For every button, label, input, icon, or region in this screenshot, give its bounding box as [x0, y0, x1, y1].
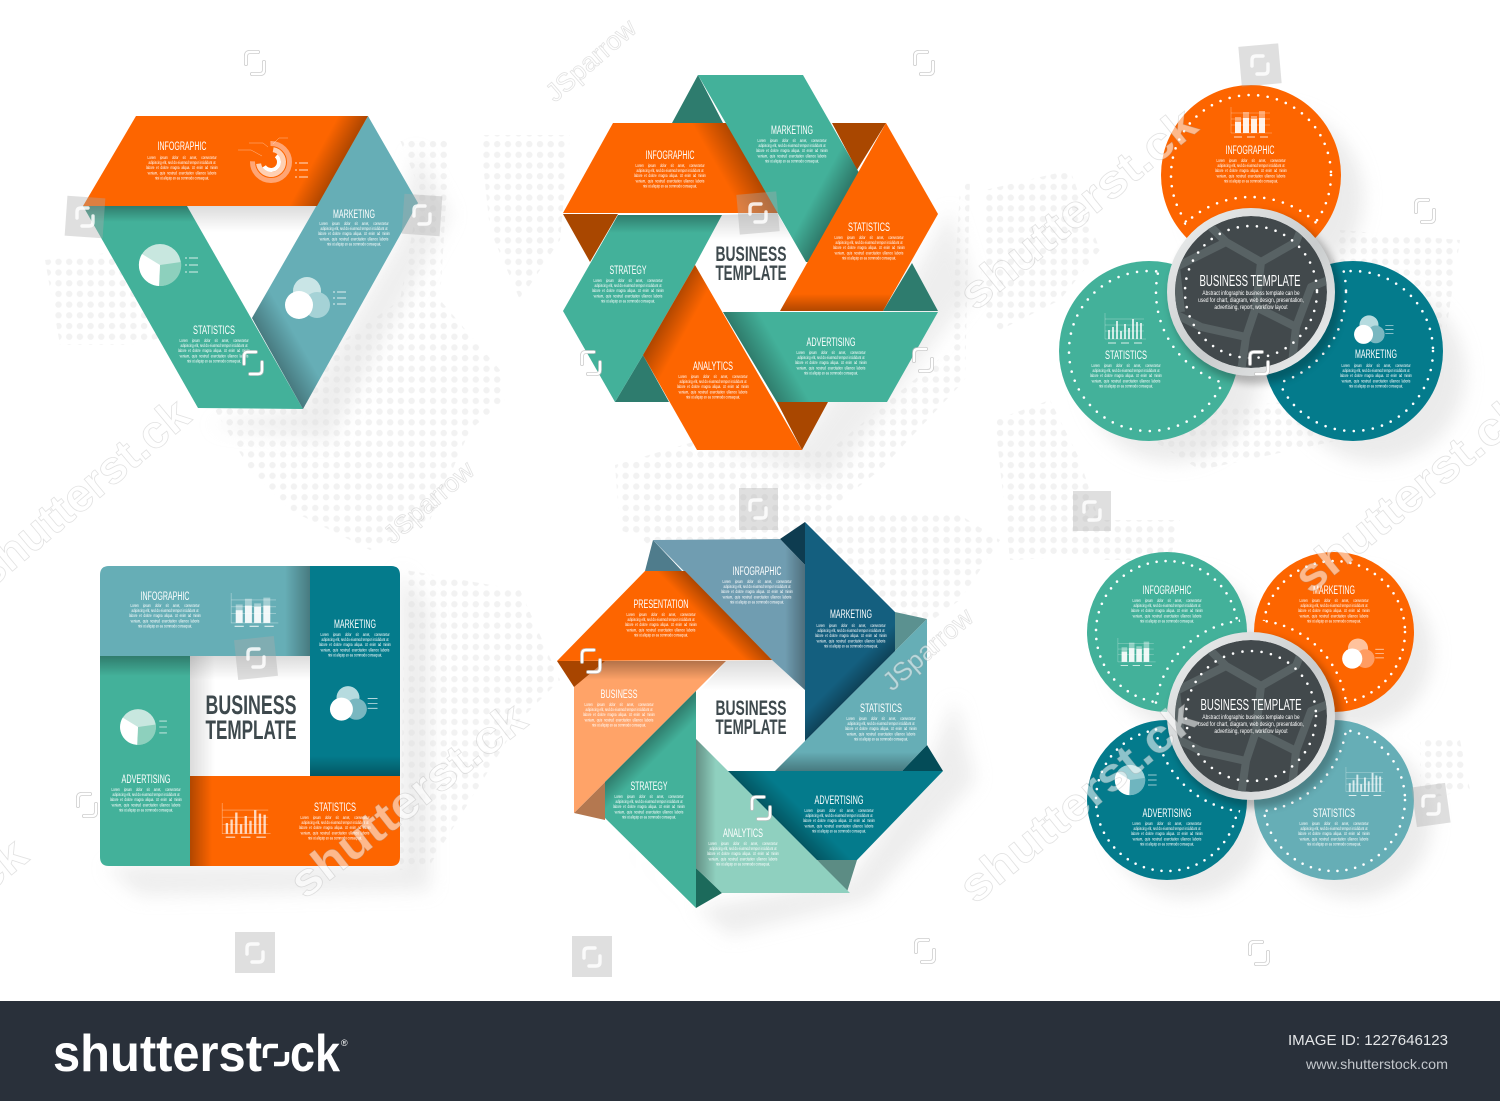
text: infographic: Lorem ipsum dolor sit amet, consectetur	[722, 579, 792, 584]
text: infographic: labore et dolore magna aliqua. Ut enim ad minim	[634, 174, 706, 178]
text: statistics: Lorem ipsum dolor sit amet, consectetur	[834, 235, 904, 240]
text: infographic: nisi ut aliquip ex ea commodo consequat.	[643, 184, 697, 189]
panel: octagon ribbon infographic	[557, 522, 975, 935]
text: center description: advertising, report, workflow layout	[1214, 728, 1288, 735]
heading: advertising: ADVERTISING	[1142, 808, 1192, 820]
heading: business template	[206, 690, 296, 745]
text: statistics: adipiscing elit, sed do eiusmod tempor incididunt ut	[848, 722, 915, 726]
text: advertising: adipiscing elit, sed do eiusmod tempor incididunt ut	[806, 814, 873, 818]
text: advertising: labore et dolore magna aliqua. Ut enim ad minim	[110, 798, 182, 802]
text: marketing: Lorem ipsum dolor sit amet, consectetur	[320, 632, 390, 637]
text: strategy: veniam, quis nostrud exercitation ullamco laboris	[615, 810, 683, 814]
heading: strategy: STRATEGY	[610, 265, 647, 277]
block: infographic	[100, 566, 310, 656]
text: strategy: Lorem ipsum dolor sit amet, consectetur	[593, 278, 663, 283]
text: marketing: nisi ut aliquip ex ea commodo consequat.	[1349, 384, 1403, 389]
circle: infographic	[1161, 85, 1341, 238]
text: advertising: Lorem ipsum dolor sit amet, consectetur	[804, 808, 874, 813]
text: center description: advertising, report, workflow layout	[1214, 304, 1288, 311]
text: advertising: labore et dolore magna aliqua. Ut enim ad minim	[1131, 832, 1203, 836]
text: statistics: labore et dolore magna aliqua. Ut enim ad minim	[178, 349, 250, 353]
ribbon: presentation	[557, 571, 772, 661]
text: advertising: adipiscing elit, sed do eiusmod tempor incididunt ut	[113, 793, 180, 797]
ribbon: business	[574, 661, 726, 813]
block: marketing	[310, 566, 400, 776]
text: advertising: nisi ut aliquip ex ea commodo consequat.	[812, 829, 866, 834]
watermarks: stock logo marks	[77, 56, 1439, 966]
text: statistics: veniam, quis nostrud exercitation ullamco laboris	[847, 732, 915, 736]
text: marketing: adipiscing elit, sed do eiusmod tempor incididunt ut	[759, 144, 826, 148]
text: infographic: nisi ut aliquip ex ea commodo consequat.	[730, 600, 784, 605]
text: infographic: nisi ut aliquip ex ea commodo consequat.	[1224, 179, 1278, 184]
ribbon: statistics	[775, 619, 927, 771]
chart: dense bars	[222, 803, 271, 837]
text: presentation: adipiscing elit, sed do eiusmod tempor incididunt ut	[628, 618, 695, 622]
text: strategy: nisi ut aliquip ex ea commodo consequat.	[622, 815, 676, 820]
heading: strategy: STRATEGY	[630, 781, 668, 793]
text: infographic: veniam, quis nostrud exercitation ullamco laboris	[131, 619, 199, 623]
text: infographic: Lorem ipsum dolor sit amet, consectetur	[147, 155, 217, 160]
panel: square infographic	[100, 566, 430, 895]
fold: top	[780, 522, 805, 565]
heading: marketing: MARKETING	[771, 125, 813, 137]
heading: infographic: INFOGRAPHIC	[646, 150, 694, 162]
text: business: adipiscing elit, sed do eiusmod tempor incididunt ut	[586, 708, 653, 712]
heading: business template: BUSINESS TEMPLATE	[1200, 697, 1302, 714]
text: statistics: nisi ut aliquip ex ea commodo consequat.	[854, 737, 908, 742]
text: analytics: labore et dolore magna aliqua. Ut enim ad minim	[707, 852, 779, 856]
footer logo: ®	[341, 1038, 348, 1048]
text: infographic: veniam, quis nostrud exercitation ullamco laboris	[723, 595, 791, 599]
heading: infographic: INFOGRAPHIC	[1226, 145, 1274, 157]
heading: infographic: INFOGRAPHIC	[140, 591, 190, 603]
heading: statistics: STATISTICS	[848, 222, 890, 234]
text: advertising: labore et dolore magna aliqua. Ut enim ad minim	[803, 819, 875, 823]
text: analytics: adipiscing elit, sed do eiusmod tempor incididunt ut	[710, 847, 777, 851]
heading: statistics: STATISTICS	[193, 325, 235, 337]
heading: marketing: MARKETING	[334, 619, 376, 631]
text: infographic: adipiscing elit, sed do eiusmod tempor incididunt ut	[637, 169, 704, 173]
text: infographic: veniam, quis nostrud exercitation ullamco laboris	[1217, 174, 1285, 178]
chart: dense bars	[1105, 313, 1146, 343]
heading: infographic: INFOGRAPHIC	[1142, 585, 1192, 597]
text: infographic: veniam, quis nostrud exercitation ullamco laboris	[1133, 614, 1201, 618]
ribbon: strategy	[563, 215, 722, 402]
fold: left top	[557, 661, 605, 687]
heading: presentation: PRESENTATION	[634, 599, 688, 611]
ribbon: marketing	[805, 522, 895, 741]
text: marketing: adipiscing elit, sed do eiusmod tempor incididunt ut	[1301, 604, 1368, 608]
background: dotted world maps	[45, 135, 1470, 870]
text: presentation: Lorem ipsum dolor sit amet, consectetur	[626, 612, 696, 617]
ribbon: statistics	[780, 123, 938, 311]
text: marketing: veniam, quis nostrud exercitation ullamco laboris	[758, 154, 826, 158]
text: analytics: adipiscing elit, sed do eiusmod tempor incididunt ut	[680, 380, 747, 384]
text: center description: Abstract infographic business template can be	[1202, 714, 1300, 721]
heading: business: BUSINESS	[600, 689, 638, 701]
text: marketing: veniam, quis nostrud exercitation ullamco laboris	[817, 639, 885, 643]
text: business: labore et dolore magna aliqua. Ut enim ad minim	[583, 713, 655, 717]
ribbon: analytics	[643, 265, 802, 450]
text: statistics: veniam, quis nostrud exercitation ullamco laboris	[1092, 379, 1160, 383]
heading: marketing: MARKETING	[830, 609, 872, 621]
text: statistics: nisi ut aliquip ex ea commodo consequat.	[308, 836, 362, 841]
watermarks: stock logo squares	[65, 43, 1451, 977]
chart: pie	[120, 709, 167, 745]
text: business: Lorem ipsum dolor sit amet, consectetur	[584, 702, 654, 707]
fold: bottom	[696, 868, 722, 908]
ribbon: advertising	[723, 312, 938, 402]
text: marketing: Lorem ipsum dolor sit amet, consectetur	[1341, 363, 1411, 368]
text: advertising: Lorem ipsum dolor sit amet, consectetur	[796, 350, 866, 355]
text: marketing: veniam, quis nostrud exercitation ullamco laboris	[1342, 379, 1410, 383]
text: infographic: adipiscing elit, sed do eiusmod tempor incididunt ut	[724, 585, 791, 589]
panel: hexagon ribbon infographic	[563, 75, 975, 480]
watermarks: author text: JSparrow	[377, 455, 480, 550]
footer logo: ck	[290, 1025, 340, 1083]
text: infographic: nisi ut aliquip ex ea commodo consequat.	[1140, 619, 1194, 624]
ribbon: infographic	[653, 539, 805, 690]
heading: statistics: STATISTICS	[314, 802, 356, 814]
text: infographic: Lorem ipsum dolor sit amet, consectetur	[130, 603, 200, 608]
block: advertising	[100, 656, 190, 866]
text: advertising: labore et dolore magna aliqua. Ut enim ad minim	[795, 361, 867, 365]
text: infographic: labore et dolore magna aliqua. Ut enim ad minim	[146, 166, 218, 170]
center ring	[1167, 632, 1335, 800]
text: marketing: nisi ut aliquip ex ea commodo consequat.	[824, 644, 878, 649]
text: marketing: adipiscing elit, sed do eiusmod tempor incididunt ut	[321, 227, 388, 231]
block: statistics	[190, 776, 400, 866]
text: marketing: Lorem ipsum dolor sit amet, consectetur	[757, 138, 827, 143]
ribbon: analytics	[696, 739, 850, 893]
text: statistics: Lorem ipsum dolor sit amet, consectetur	[300, 815, 370, 820]
text: infographic: Lorem ipsum dolor sit amet, consectetur	[1132, 598, 1202, 603]
text: marketing: labore et dolore magna aliqua. Ut enim ad minim	[319, 643, 391, 647]
panel: three circles infographic	[1059, 85, 1465, 462]
fold: right bottom	[902, 745, 943, 771]
text: analytics: Lorem ipsum dolor sit amet, consectetur	[708, 841, 778, 846]
text: statistics: labore et dolore magna aliqua. Ut enim ad minim	[1090, 374, 1162, 378]
text: marketing: labore et dolore magna aliqua. Ut enim ad minim	[318, 232, 390, 236]
text: infographic: labore et dolore magna aliqua. Ut enim ad minim	[129, 614, 201, 618]
heading: business template: TEMPLATE	[206, 715, 296, 745]
text: infographic: veniam, quis nostrud exercitation ullamco laboris	[636, 179, 704, 183]
text: statistics: nisi ut aliquip ex ea commodo consequat.	[1307, 842, 1361, 847]
text: statistics: labore et dolore magna aliqua. Ut enim ad minim	[1298, 832, 1370, 836]
text: strategy: veniam, quis nostrud exercitation ullamco laboris	[594, 294, 662, 298]
text: analytics: nisi ut aliquip ex ea commodo consequat.	[716, 862, 770, 867]
text: statistics: Lorem ipsum dolor sit amet, consectetur	[179, 338, 249, 343]
text: advertising: adipiscing elit, sed do eiusmod tempor incididunt ut	[798, 356, 865, 360]
text: infographic: adipiscing elit, sed do eiusmod tempor incididunt ut	[132, 609, 199, 613]
ribbon: infographic	[83, 116, 368, 206]
watermarks: shutterstock text: shutterst.ck	[949, 690, 1207, 913]
heading: business template	[716, 243, 786, 285]
watermarks: author text: JSparrow	[876, 602, 979, 697]
watermarks: author text: JSparrow	[539, 13, 642, 108]
text: statistics: veniam, quis nostrud exercitation ullamco laboris	[301, 831, 369, 835]
text: statistics: nisi ut aliquip ex ea commodo consequat.	[187, 359, 241, 364]
text: analytics: veniam, quis nostrud exercitation ullamco laboris	[679, 390, 747, 394]
chart: bars	[231, 593, 278, 626]
text: center description: used for chart, diagram, web design, presentation,	[1198, 721, 1304, 728]
fold: bottom right	[817, 860, 857, 892]
text: strategy: nisi ut aliquip ex ea commodo consequat.	[601, 299, 655, 304]
ribbon: advertising	[728, 771, 943, 860]
ribbon: marketing	[252, 116, 418, 409]
text: statistics: veniam, quis nostrud exercitation ullamco laboris	[180, 354, 248, 358]
watermarks: shutterstock text: shutterst.ck	[279, 691, 536, 908]
heading: statistics: STATISTICS	[1313, 808, 1355, 820]
text: statistics: adipiscing elit, sed do eiusmod tempor incididunt ut	[1301, 827, 1368, 831]
text: analytics: labore et dolore magna aliqua. Ut enim ad minim	[677, 385, 749, 389]
ribbon: statistics	[83, 206, 303, 409]
text: advertising: veniam, quis nostrud exercitation ullamco laboris	[1133, 837, 1201, 841]
text: advertising: nisi ut aliquip ex ea commodo consequat.	[804, 371, 858, 376]
text: presentation: nisi ut aliquip ex ea commodo consequat.	[634, 633, 688, 638]
text: center description: used for chart, diagram, web design, presentation,	[1198, 297, 1304, 304]
text: statistics: Lorem ipsum dolor sit amet, consectetur	[1299, 821, 1369, 826]
heading: analytics: ANALYTICS	[693, 361, 733, 373]
text: infographic: veniam, quis nostrud exercitation ullamco laboris	[148, 171, 216, 175]
text: advertising: Lorem ipsum dolor sit amet, consectetur	[111, 787, 181, 792]
text: statistics: nisi ut aliquip ex ea commodo consequat.	[842, 256, 896, 261]
text: marketing: veniam, quis nostrud exercitation ullamco laboris	[321, 648, 389, 652]
center ring	[1167, 208, 1335, 376]
footer url: www.shutterstock.com	[1305, 1056, 1448, 1072]
fold: left bottom	[574, 782, 605, 820]
circle: marketing	[1266, 261, 1443, 441]
text: marketing: nisi ut aliquip ex ea commodo consequat.	[1307, 619, 1361, 624]
chart: venn	[330, 686, 378, 721]
heading: analytics: ANALYTICS	[723, 828, 763, 840]
text: marketing: labore et dolore magna aliqua. Ut enim ad minim	[815, 634, 887, 638]
text: presentation: labore et dolore magna aliqua. Ut enim ad minim	[625, 623, 697, 627]
text: statistics: adipiscing elit, sed do eiusmod tempor incididunt ut	[1093, 369, 1160, 373]
text: marketing: Lorem ipsum dolor sit amet, consectetur	[319, 221, 389, 226]
text: analytics: nisi ut aliquip ex ea commodo consequat.	[686, 395, 740, 400]
chart: bars	[1118, 638, 1156, 666]
chart: venn	[1354, 315, 1393, 344]
text: marketing: adipiscing elit, sed do eiusmod tempor incididunt ut	[322, 638, 389, 642]
text: marketing: adipiscing elit, sed do eiusmod tempor incididunt ut	[1343, 369, 1410, 373]
text: marketing: nisi ut aliquip ex ea commodo consequat.	[765, 159, 819, 164]
chart: pie	[1115, 765, 1157, 795]
text: center description: Abstract infographic business template can be	[1202, 290, 1300, 297]
text: statistics: adipiscing elit, sed do eiusmod tempor incididunt ut	[302, 821, 369, 825]
fold: top	[672, 75, 723, 123]
text: infographic: labore et dolore magna aliqua. Ut enim ad minim	[1131, 609, 1203, 613]
heading: advertising: ADVERTISING	[814, 795, 864, 807]
text: analytics: Lorem ipsum dolor sit amet, consectetur	[678, 374, 748, 379]
heading: business template: BUSINESS	[716, 243, 786, 266]
chart: pie	[139, 244, 198, 286]
fold: top left	[645, 540, 682, 571]
chart: venn	[1342, 638, 1384, 669]
watermarks: author text	[377, 13, 979, 697]
chart: donut	[238, 138, 308, 180]
heading: marketing: MARKETING	[1313, 585, 1355, 597]
text: advertising: nisi ut aliquip ex ea commodo consequat.	[119, 808, 173, 813]
fold: left	[563, 214, 618, 262]
text: statistics: adipiscing elit, sed do eiusmod tempor incididunt ut	[181, 344, 248, 348]
text: infographic: adipiscing elit, sed do eiusmod tempor incididunt ut	[1134, 604, 1201, 608]
text: infographic: adipiscing elit, sed do eiusmod tempor incididunt ut	[1218, 164, 1285, 168]
text: statistics: labore et dolore magna aliqua. Ut enim ad minim	[833, 246, 905, 250]
text: statistics: Lorem ipsum dolor sit amet, consectetur	[1091, 363, 1161, 368]
text: advertising: adipiscing elit, sed do eiusmod tempor incididunt ut	[1134, 827, 1201, 831]
footer bar	[0, 1001, 1500, 1101]
text: analytics: veniam, quis nostrud exercitation ullamco laboris	[709, 857, 777, 861]
heading: advertising: ADVERTISING	[806, 337, 856, 349]
text: advertising: veniam, quis nostrud exercitation ullamco laboris	[797, 366, 865, 370]
panel: four circles infographic	[1087, 552, 1432, 898]
text: statistics: veniam, quis nostrud exercitation ullamco laboris	[1300, 837, 1368, 841]
text: strategy: labore et dolore magna aliqua. Ut enim ad minim	[613, 805, 685, 809]
text: marketing: veniam, quis nostrud exercitation ullamco laboris	[1300, 614, 1368, 618]
text: strategy: labore et dolore magna aliqua. Ut enim ad minim	[592, 289, 664, 293]
text: infographic: Lorem ipsum dolor sit amet, consectetur	[635, 163, 705, 168]
heading: infographic: INFOGRAPHIC	[732, 566, 782, 578]
text: business: veniam, quis nostrud exercitation ullamco laboris	[585, 718, 653, 722]
fold: top right	[832, 123, 886, 170]
text: advertising: veniam, quis nostrud exercitation ullamco laboris	[112, 803, 180, 807]
heading: business template: BUSINESS	[206, 690, 296, 720]
heading: advertising: ADVERTISING	[122, 774, 171, 786]
text: marketing: labore et dolore magna aliqua. Ut enim ad minim	[1298, 609, 1370, 613]
text: infographic: Lorem ipsum dolor sit amet, consectetur	[1216, 158, 1286, 163]
text: marketing: nisi ut aliquip ex ea commodo consequat.	[328, 653, 382, 658]
footer logo: shutterst	[53, 1025, 262, 1083]
watermarks: small logo outlines	[78, 52, 1434, 964]
text: statistics: labore et dolore magna aliqua. Ut enim ad minim	[845, 727, 917, 731]
center disc	[1175, 640, 1327, 792]
text: infographic: nisi ut aliquip ex ea commodo consequat.	[138, 624, 192, 629]
chart: bars	[1231, 107, 1272, 137]
text: advertising: veniam, quis nostrud exercitation ullamco laboris	[805, 824, 873, 828]
heading: business template	[716, 697, 786, 739]
fold: bottom	[777, 402, 828, 450]
text: statistics: Lorem ipsum dolor sit amet, consectetur	[846, 716, 916, 721]
ribbon: marketing	[698, 75, 862, 262]
text: marketing: adipiscing elit, sed do eiusmod tempor incididunt ut	[818, 629, 885, 633]
text: statistics: veniam, quis nostrud exercitation ullamco laboris	[835, 251, 903, 255]
text: statistics: nisi ut aliquip ex ea commodo consequat.	[1099, 384, 1153, 389]
text: infographic: adipiscing elit, sed do eiusmod tempor incididunt ut	[149, 161, 216, 165]
text: statistics: adipiscing elit, sed do eiusmod tempor incididunt ut	[836, 241, 903, 245]
text: statistics: labore et dolore magna aliqua. Ut enim ad minim	[299, 826, 371, 830]
fold: right	[883, 263, 938, 311]
heading: business template: BUSINESS	[716, 697, 786, 720]
text: advertising: nisi ut aliquip ex ea commodo consequat.	[1140, 842, 1194, 847]
ribbon: infographic	[563, 123, 778, 213]
chart: venn	[285, 277, 346, 319]
ribbon: strategy	[605, 691, 696, 908]
heading: marketing: MARKETING	[1355, 349, 1397, 361]
chart: dense bars	[1346, 767, 1385, 796]
text: presentation: veniam, quis nostrud exercitation ullamco laboris	[627, 628, 695, 632]
heading: infographic: INFOGRAPHIC	[158, 141, 206, 153]
heading: marketing: MARKETING	[333, 209, 375, 221]
heading: business template: TEMPLATE	[716, 716, 786, 739]
fold: bottom left	[615, 355, 669, 402]
text: marketing: labore et dolore magna aliqua. Ut enim ad minim	[756, 149, 828, 153]
text: infographic: labore et dolore magna aliqua. Ut enim ad minim	[1215, 169, 1287, 173]
center disc	[1175, 216, 1327, 368]
circle: advertising	[1087, 720, 1247, 880]
text: strategy: adipiscing elit, sed do eiusmod tempor incididunt ut	[595, 284, 662, 288]
text: marketing: Lorem ipsum dolor sit amet, consectetur	[816, 623, 886, 628]
text: strategy: adipiscing elit, sed do eiusmod tempor incididunt ut	[616, 800, 683, 804]
text: marketing: nisi ut aliquip ex ea commodo consequat.	[327, 242, 381, 247]
text: marketing: Lorem ipsum dolor sit amet, consectetur	[1299, 598, 1369, 603]
heading: business template: TEMPLATE	[716, 262, 786, 285]
watermarks: shutterstock text: shutterst.ck	[949, 97, 1207, 320]
fold: right top	[895, 612, 927, 651]
text: advertising: Lorem ipsum dolor sit amet, consectetur	[1132, 821, 1202, 826]
circle: infographic	[1087, 552, 1247, 712]
text: marketing: veniam, quis nostrud exercitation ullamco laboris	[320, 237, 388, 241]
text: strategy: Lorem ipsum dolor sit amet, consectetur	[614, 794, 684, 799]
circle: statistics	[1254, 720, 1414, 880]
heading: statistics: STATISTICS	[860, 703, 902, 715]
text: business: nisi ut aliquip ex ea commodo consequat.	[592, 723, 646, 728]
heading: statistics: STATISTICS	[1105, 350, 1147, 362]
heading: business template: BUSINESS TEMPLATE	[1200, 273, 1300, 290]
text: marketing: labore et dolore magna aliqua. Ut enim ad minim	[1340, 374, 1412, 378]
text: infographic: nisi ut aliquip ex ea commodo consequat.	[155, 176, 209, 181]
circle: marketing	[1254, 552, 1414, 712]
footer image id: IMAGE ID: 1227646123	[1288, 1032, 1448, 1049]
text: infographic: labore et dolore magna aliqua. Ut enim ad minim	[721, 590, 793, 594]
panel: triangle ribbon infographic	[83, 116, 450, 440]
circle: statistics	[1059, 261, 1236, 441]
